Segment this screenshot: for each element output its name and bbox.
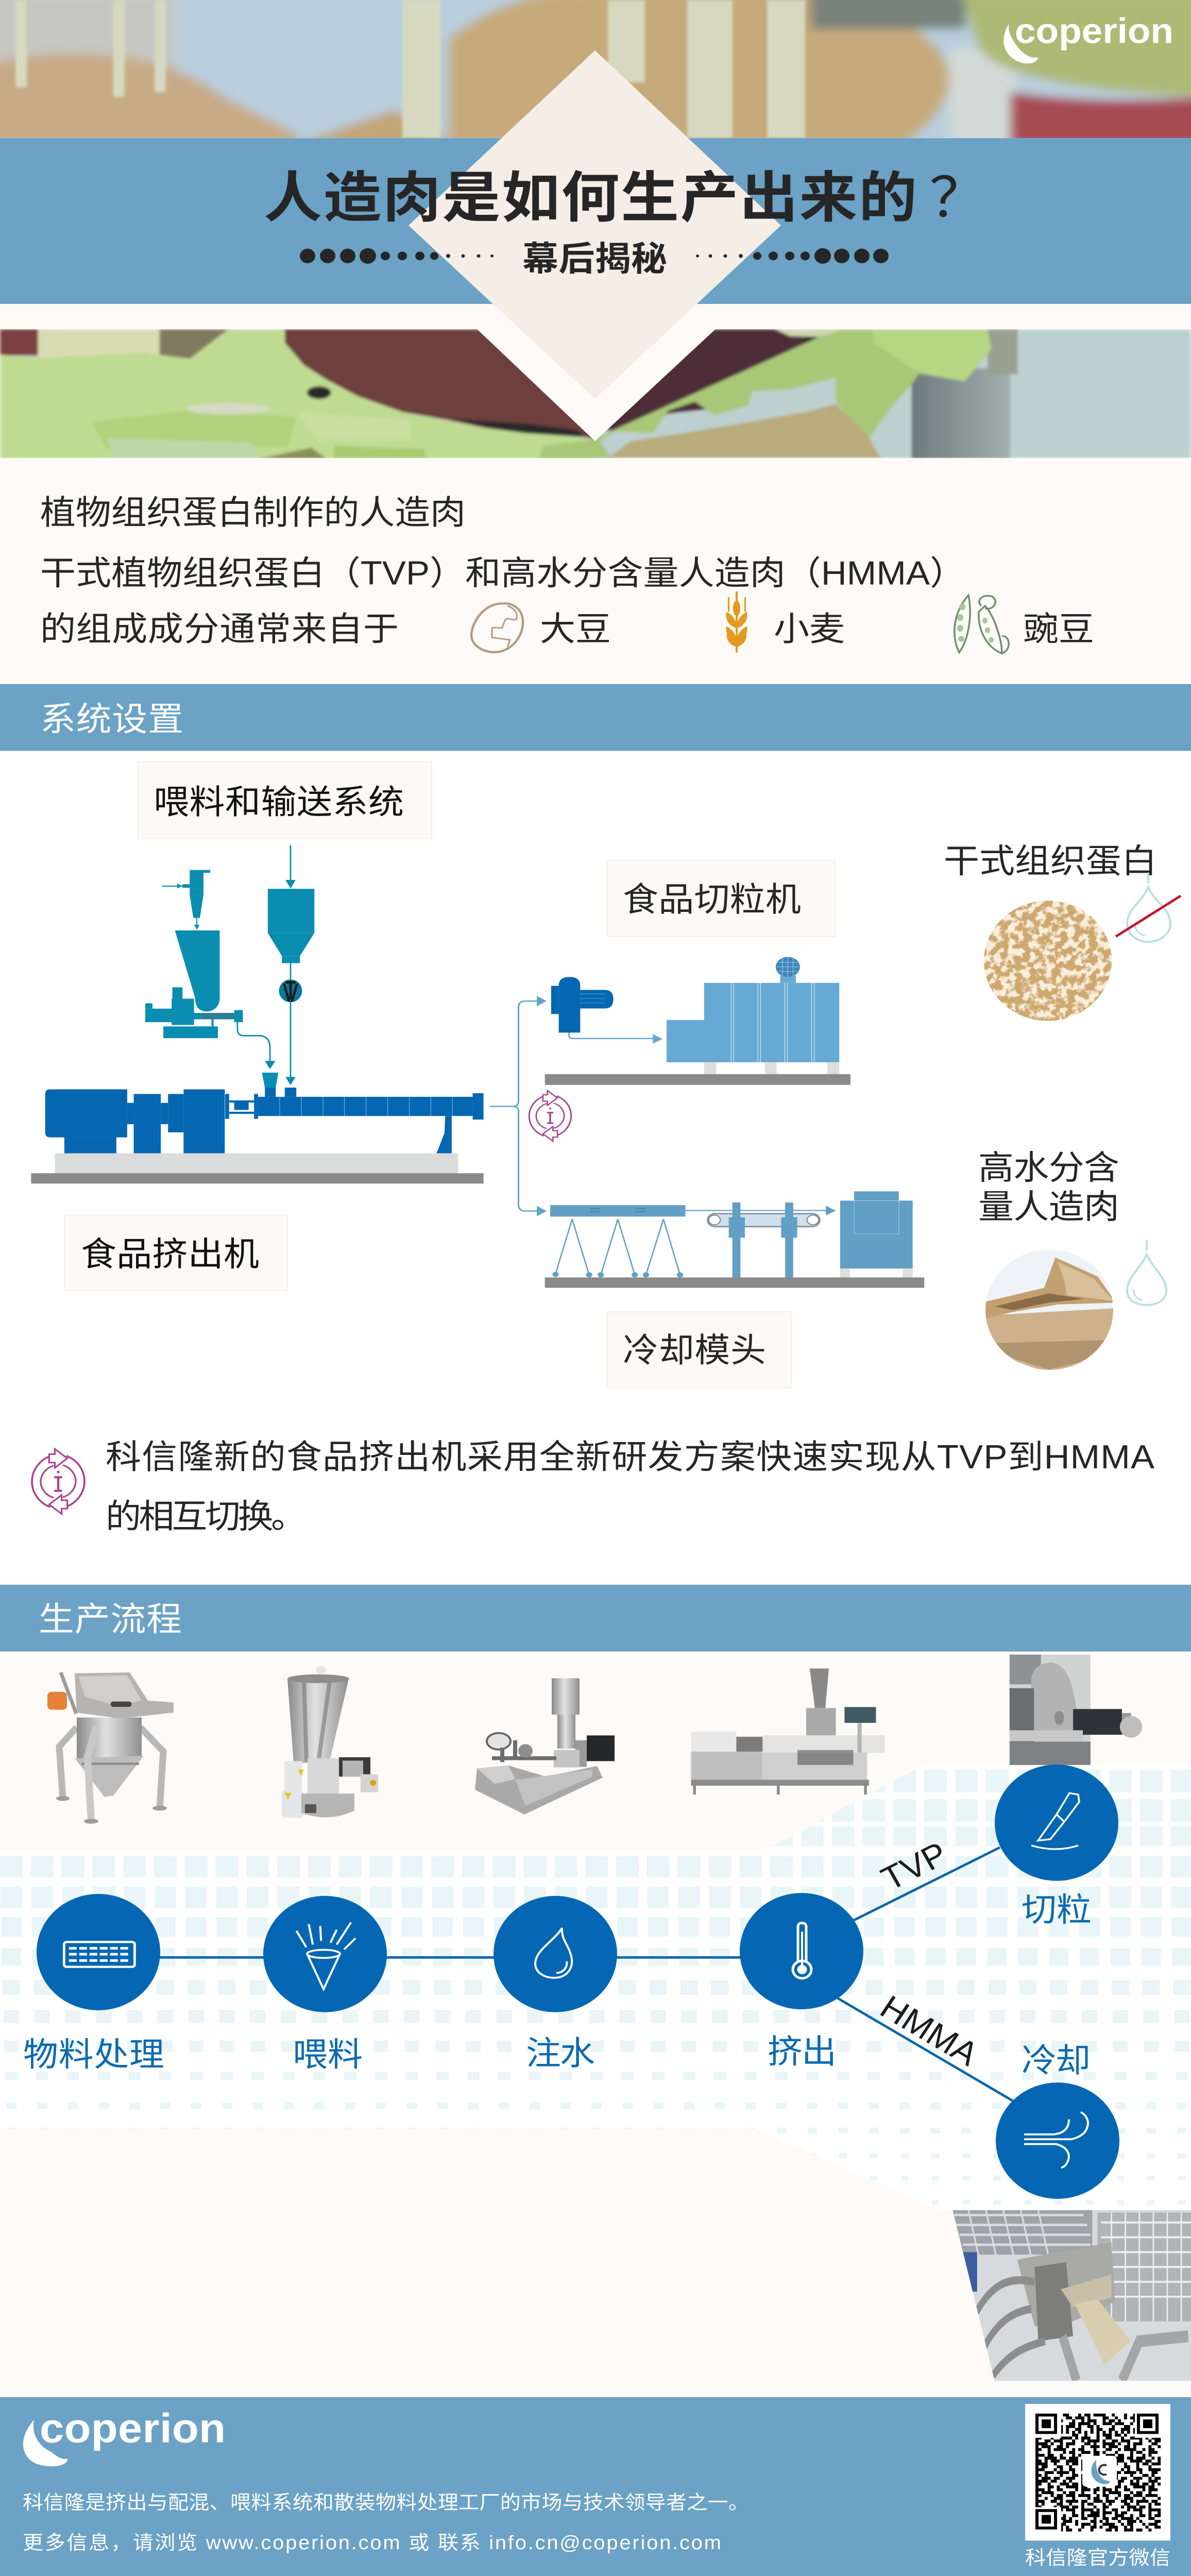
dryer: [667, 975, 839, 1062]
subtitle with dots: 幕后揭秘: [522, 240, 667, 278]
intro line 2: 干式植物组织蛋白（TVP）和高水分含量人造肉（HMMA）: [40, 555, 965, 592]
section bar: system setup: [0, 684, 1191, 751]
icon: switch (note): [32, 1449, 84, 1514]
diagram: pelletizer and cooling die lines: [489, 957, 924, 1288]
label: food pelletizer: 食品切粒机: [623, 881, 801, 919]
subtitle with dots: [300, 240, 889, 278]
panel: intro: [0, 458, 1191, 684]
process connector lines: [98, 1848, 1014, 2102]
branching arrows: [489, 1001, 539, 1211]
white chevron: [477, 329, 716, 441]
blower: [551, 977, 614, 1032]
note text: 科信隆新的食品挤出机采用全新研发方案快速实现从TVP到HMMA: [106, 1438, 1154, 1476]
photo: pelletizer machine: [1010, 1655, 1142, 1767]
label: food extruder: 食品挤出机: [81, 1236, 259, 1273]
photo: feeder machine: [282, 1666, 378, 1818]
section bar: production process: [0, 1585, 1191, 1652]
label: food extruder: [64, 1215, 287, 1291]
soybean label: 大豆: [540, 611, 611, 648]
extruder: [45, 1088, 484, 1154]
QR caption: 科信隆官方微信: [1025, 2547, 1170, 2569]
section bar: system setup: 系统设置: [40, 701, 183, 738]
icon: water drop crossed out: [1116, 873, 1181, 942]
step: cooling: 冷却: [1022, 2042, 1091, 2079]
step: pelletizing: 切粒: [1022, 1891, 1092, 1928]
photo: top burgers on skewers: [0, 0, 1191, 150]
label: cooling die: [607, 1312, 791, 1388]
photo: high moisture protein: [981, 1248, 1116, 1373]
step: water injection: [494, 1896, 617, 2072]
step: material handling: 物料处理: [23, 2036, 164, 2073]
label: food pelletizer: [607, 860, 835, 937]
contact line: 更多信息，请浏览 www.coperion.com 或 联系 info.cn@coperion.com: [23, 2532, 721, 2554]
label: HMMA branch: HMMA: [874, 1988, 985, 2073]
label: high moisture meat: [978, 1149, 1119, 1226]
photo: extruder machine: [691, 1668, 884, 1794]
icon: sieve: [64, 1942, 134, 1967]
beige diamond: [409, 50, 781, 399]
step: pelletizing: [995, 1765, 1118, 1928]
QR code: [1025, 2404, 1170, 2540]
note text: 的相互切换。: [106, 1498, 307, 1535]
photo: cooling die machine: [952, 2210, 1191, 2381]
photo: water injection machine: [475, 1678, 615, 1815]
intro line 1: 植物组织蛋白制作的人造肉: [40, 494, 466, 532]
cooling die: [550, 1205, 685, 1216]
icon: cone with sparks: [296, 1922, 355, 1989]
panel: title band: [0, 138, 1191, 304]
company description: 科信隆是挤出与配混、喂料系统和散装物料处理工厂的市场与技术领导者之一。: [23, 2492, 749, 2514]
title: ？: [929, 168, 988, 229]
icon: wind: [1024, 2112, 1088, 2168]
wheat label: 小麦: [774, 611, 845, 648]
icon: thermometer: [793, 1923, 811, 1978]
step: extrusion: [740, 1893, 863, 2070]
label: dry textured protein: 干式组织蛋白: [944, 842, 1157, 880]
icon: peas: [955, 595, 1009, 653]
icon: knife: [1031, 1793, 1079, 1849]
photo: material handling machine: [47, 1672, 174, 1824]
label: feeding and conveying system: [138, 761, 432, 839]
title: 人造肉是如何生产出来的: [264, 168, 917, 229]
step: feeding: 喂料: [293, 2036, 363, 2073]
logo: coperion footer: coperion: [40, 2405, 226, 2451]
panel: footer: [0, 2397, 1191, 2576]
label: TVP branch: TVP: [875, 1835, 954, 1897]
step: feeding: [263, 1896, 387, 2073]
note text: [106, 1438, 1154, 1535]
icon: switch (in diagram): [529, 1091, 571, 1141]
label: high moisture meat: 高水分含: [978, 1149, 1119, 1187]
intro line 3: 的组成成分通常来自于: [40, 611, 399, 648]
section bar: production process: 生产流程: [39, 1601, 182, 1638]
label: cooling die: 冷却模头: [623, 1332, 766, 1369]
icon: water drop: [1127, 1241, 1166, 1305]
diagram: feeders and extruder: [31, 845, 484, 1183]
peas label: 豌豆: [1023, 611, 1094, 648]
logo: coperion top: coperion: [1015, 12, 1173, 51]
panel: process background: [0, 1652, 1191, 2397]
silo: [268, 845, 314, 1085]
icon: wheat: [726, 591, 747, 652]
icon: soybean: [471, 603, 523, 652]
label: high moisture meat: 量人造肉: [978, 1188, 1119, 1226]
step: material handling: [23, 1894, 164, 2073]
logo: coperion footer: [23, 2405, 226, 2466]
step: cooling: [996, 2042, 1119, 2199]
photo: burger patty and lettuce: [0, 329, 1191, 459]
white spacer band: [0, 304, 1191, 329]
step: water injection: 注水: [526, 2035, 595, 2072]
feeder with cyclone: [145, 870, 243, 1038]
icon: drop: [535, 1928, 572, 1978]
label: feeding and conveying system: 喂料和输送系统: [154, 784, 404, 821]
step: extrusion: 挤出: [768, 2033, 837, 2070]
panel: white patterned band: [0, 1765, 1191, 2210]
photo: dry TVP: [984, 901, 1112, 1021]
